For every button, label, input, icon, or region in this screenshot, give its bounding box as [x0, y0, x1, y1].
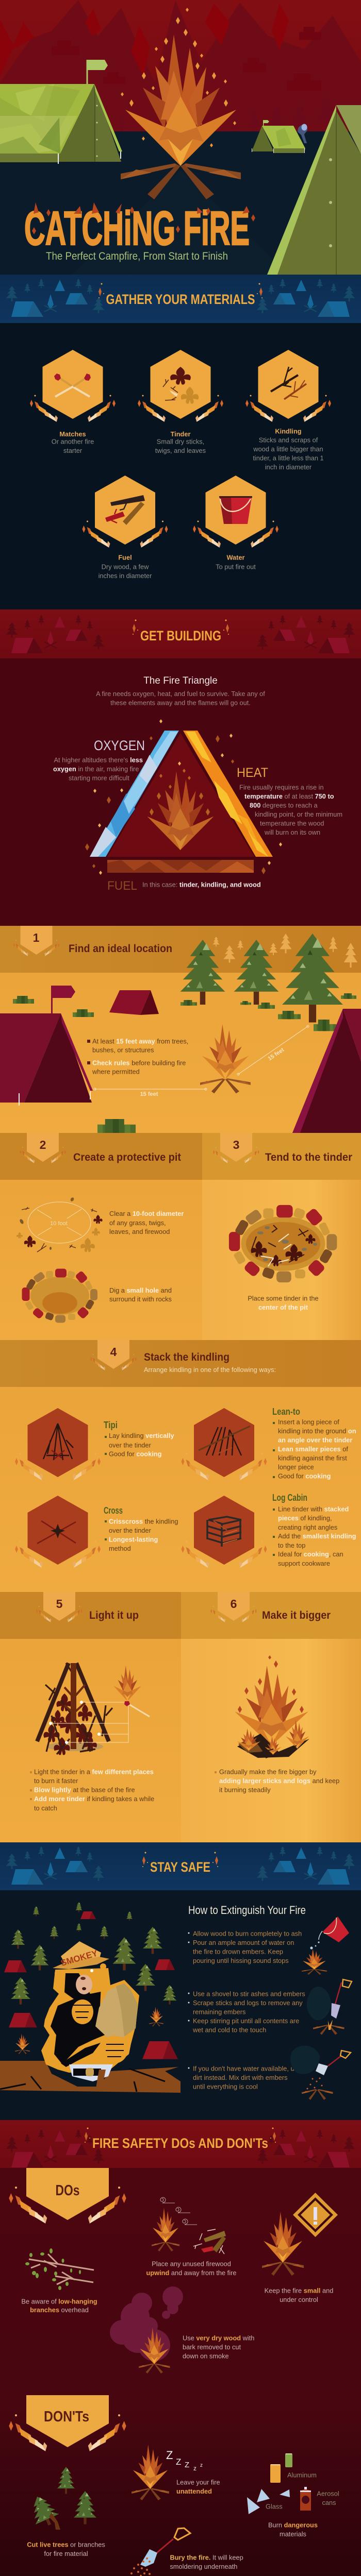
don't: bury the fire: smoldering underneath	[170, 2563, 237, 2570]
panel: fire safety dos and don'ts	[0, 2120, 361, 2576]
don't: dangerous materials: Aerosol	[317, 2489, 339, 2498]
item: matches: Or another fire	[52, 438, 94, 445]
method: lean-to: Good for cooking	[278, 1472, 331, 1480]
illustration: smokey bear	[0, 1941, 180, 2093]
do: small fire	[262, 2193, 338, 2303]
band pines	[212, 934, 357, 968]
heading: FIRE SAFETY DOs AND DON'Ts	[92, 2136, 268, 2151]
method: log cabin: Log Cabin	[272, 1493, 307, 1503]
ribbon: number 5: 5	[56, 1597, 63, 1611]
panel: get building, fire triangle	[0, 609, 361, 926]
heading: how to extinguish: How to Extinguish Your Fire	[188, 1904, 306, 1917]
section banner	[0, 275, 361, 323]
intro text: A fire needs oxygen, heat, and fuel to survive. Take any of	[96, 690, 265, 698]
subtitle: The Perfect Campfire, From Start to Finish	[46, 250, 228, 262]
cleared area diagram	[17, 1197, 103, 1252]
section banner	[0, 2120, 361, 2168]
heading: Tend to the tinder	[265, 1151, 352, 1163]
do: dry wood: Use very dry wood with	[183, 2334, 254, 2342]
method: lean-to: longer piece	[278, 1463, 314, 1471]
panel: stay safe	[0, 1842, 361, 2120]
method: tipi: Tipi	[104, 1420, 118, 1430]
icon: zzz: z	[200, 2463, 203, 2468]
campfire	[121, 35, 241, 199]
icon: lit match	[113, 1666, 150, 1717]
icon: wind swirls	[160, 2197, 197, 2225]
item: kindling: inch in diameter	[265, 463, 312, 471]
dos ribbon: DOs	[56, 2182, 79, 2199]
clear text: leaves, and firewood	[109, 1228, 170, 1235]
icon: aluminum cans	[270, 2453, 292, 2483]
item: water	[193, 476, 278, 571]
embers	[121, 8, 236, 147]
steps: dirt: until everything is cool	[193, 2082, 258, 2091]
heading: Stack the kindling	[144, 1351, 229, 1363]
method: cross: Cross	[104, 1505, 123, 1516]
item: fuel: inches in diameter	[99, 572, 152, 580]
don't: leave unattended: unattended	[176, 2487, 212, 2495]
left green tent	[0, 60, 122, 164]
steps: dirt	[188, 2065, 301, 2091]
location tips: bushes, or structures	[92, 1046, 154, 1054]
heading: Light it up	[89, 1609, 139, 1621]
small green tent with figure	[252, 120, 307, 153]
item: kindling: Sticks and scraps of	[259, 436, 318, 444]
icon: shovel with dirt	[290, 2046, 351, 2100]
steps: dirt: If you don't have water available, use	[193, 2065, 301, 2072]
intro text: these elements away and the flames will go out.	[110, 699, 251, 707]
item: tinder: Tinder	[171, 430, 190, 438]
icon: glass shards	[247, 2489, 290, 2514]
do: small fire: Keep the fire small and	[265, 2286, 333, 2295]
do: dry wood	[110, 2286, 254, 2374]
ribbon: number 5	[36, 1592, 83, 1622]
oxygen side	[90, 731, 179, 857]
light text: to burn it faster	[34, 1777, 78, 1785]
tinder text: center of the pit	[258, 1303, 308, 1311]
icon: smoke	[110, 2286, 183, 2361]
heat text: will burn on its own	[264, 828, 320, 836]
right maroon tent	[292, 1009, 361, 1133]
title	[24, 201, 255, 255]
rock stacks	[52, 27, 321, 91]
do: upwind firewood	[146, 2197, 236, 2277]
heading: the fire triangle: The Fire Triangle	[143, 675, 218, 686]
item: tinder: twigs, and leaves	[155, 447, 206, 454]
icon: shovel burying fire	[129, 2528, 190, 2576]
do: upwind firewood: Place any unused firewood	[152, 2260, 231, 2268]
steps: water: Allow wood to burn completely to ash	[193, 1930, 302, 1937]
panel: step 4 stack the kindling	[0, 1340, 361, 1592]
method: lean-to: Lean-to	[272, 1406, 300, 1417]
bigger text	[215, 1768, 339, 1794]
don't: dangerous materials: Glass	[266, 2503, 283, 2510]
method: log cabin: to the top	[278, 1541, 305, 1549]
ribbon: number 3	[213, 1133, 259, 1163]
do: upwind firewood: upwind and away from the fire	[146, 2269, 236, 2277]
tinder text: Place some tinder in the	[248, 1294, 319, 1302]
ribbon: number 4	[90, 1340, 137, 1370]
don't: leave unattended	[132, 2445, 220, 2500]
ribbon: number 2: 2	[40, 1138, 46, 1151]
method: lean-to	[182, 1406, 356, 1480]
method: lean-to: kindling against the first	[278, 1454, 347, 1462]
icon: crossed matches	[54, 374, 91, 397]
15 feet measure, diagonal: 15 feet	[267, 1047, 285, 1062]
icon: branches	[25, 2248, 94, 2290]
don't: cut live trees	[25, 2467, 105, 2557]
method: tipi: Lay kindling vertically	[109, 1432, 175, 1439]
bigger text: Gradually make the fire bigger by	[219, 1768, 317, 1775]
subheading: Arrange kindling in one of the following ways:	[144, 1366, 276, 1374]
don't: bury the fire	[129, 2528, 243, 2576]
item: matches	[30, 350, 116, 454]
panel: step 3 tend to the tinder	[202, 1133, 361, 1340]
icon: leaves and twigs	[163, 367, 199, 404]
panel: hero scene	[0, 0, 361, 275]
don't: dangerous materials	[247, 2453, 339, 2538]
heading: Create a protective pit	[73, 1151, 181, 1163]
oxygen text: starting more difficult	[69, 774, 129, 782]
fuel text	[107, 879, 261, 893]
fuel text: In this case: tinder, kindling, and wood	[142, 881, 261, 888]
item: kindling: wood a little bigger than	[253, 445, 323, 453]
ribbon: number 2	[20, 1133, 66, 1163]
light text: Blow lightly at the base of the fire	[34, 1786, 135, 1794]
don'ts ribbon	[9, 2395, 126, 2451]
method: cross: method	[109, 1545, 131, 1552]
method: log cabin: pieces of kindling,	[278, 1514, 332, 1522]
bigger text: it burning steadily	[219, 1786, 271, 1794]
dig text: Dig a small hole and	[109, 1286, 172, 1294]
intro text	[96, 690, 265, 707]
dug pit with rocks	[22, 1268, 97, 1323]
heading: STAY SAFE	[150, 1859, 210, 1875]
item: kindling: tinder, a little less than 1	[253, 454, 324, 462]
oxygen text: At higher altitudes there's less	[54, 756, 143, 764]
item: tinder: Small dry sticks,	[157, 438, 204, 445]
heat text: HEAT	[237, 766, 268, 780]
method: cross: over the tinder	[109, 1527, 152, 1534]
don't: dangerous materials: Burn dangerous	[268, 2521, 318, 2529]
dig text: surround it with rocks	[109, 1295, 172, 1303]
item: fuel: Fuel	[118, 553, 132, 562]
clear text: Clear a 10-foot diameter	[109, 1210, 184, 1217]
steps: shovel: Keep stirring pit until all contents are	[193, 2017, 299, 2025]
section banner	[0, 609, 361, 658]
item: water: To put fire out	[216, 563, 256, 571]
heading: Find an ideal location	[69, 943, 172, 955]
15 feet measure, horizontal	[94, 1088, 207, 1097]
background mountains	[0, 0, 361, 131]
method: log cabin: Add the smallest kindling	[278, 1532, 356, 1540]
method: lean-to: Lean smaller pieces of	[278, 1445, 348, 1453]
fuel text: FUEL	[107, 879, 137, 893]
heading: GATHER YOUR MATERIALS	[106, 292, 255, 307]
icon: shovel stirring embers	[307, 1979, 352, 2035]
don'ts ribbon: DON'Ts	[44, 2409, 89, 2425]
method: cross	[15, 1496, 178, 1568]
item: kindling: Kindling	[275, 428, 302, 435]
clear text: of any grass, twigs,	[109, 1219, 166, 1227]
heat text	[237, 766, 342, 836]
do: branches: Be aware of low-hanging	[21, 2298, 97, 2305]
steps: shovel: wet and cold to the touch	[192, 2026, 266, 2034]
method: cross: Crisscross the kindling	[109, 1518, 178, 1525]
method: tipi: over the tinder	[109, 1442, 152, 1449]
right big green tent	[267, 105, 361, 275]
ribbon: number 1: 1	[33, 931, 40, 944]
panel: step 6 make it bigger	[181, 1592, 361, 1842]
method: cross: Longest-lasting	[109, 1535, 158, 1544]
panel: gather your materials	[0, 275, 361, 609]
icon: warning diamond	[293, 2193, 338, 2237]
item: kindling	[245, 350, 331, 471]
icon: zzz: Z	[176, 2457, 181, 2467]
clear text	[109, 1210, 184, 1235]
don't: cut live trees: Cut live trees or branches	[27, 2541, 105, 2548]
icon: bucket	[219, 496, 252, 524]
heat text: kindling point, or the minimum	[255, 810, 342, 818]
light text	[30, 1768, 154, 1812]
cleared area diagram: 10 foot	[50, 1221, 68, 1227]
heat text: temperature of at least 750 to	[244, 792, 334, 800]
icon: bucket over fire	[302, 1917, 349, 1975]
method: lean-to: kindling into the ground on	[278, 1427, 356, 1435]
method: lean-to: Insert a long piece of	[278, 1418, 339, 1426]
oxygen text	[53, 738, 145, 782]
heat text: 800 degrees to reach a	[250, 802, 318, 809]
don't: leave unattended: Leave your fire	[176, 2478, 220, 2486]
icon: tipi sticks	[43, 1423, 73, 1460]
heading: GET BUILDING	[140, 628, 221, 643]
steps: water: pouring until hissing sound stops	[193, 1957, 289, 1964]
steps: dirt: dirt instead. Mix dirt with embers	[193, 2074, 287, 2081]
method: log cabin: creating right angles	[278, 1523, 337, 1531]
small maroon tent	[109, 990, 159, 1015]
heat side	[183, 731, 273, 857]
location tips: At least 15 feet away from trees,	[92, 1038, 188, 1045]
icon: logs	[105, 495, 145, 525]
fuel side	[107, 860, 254, 873]
fire triangle diagram	[85, 719, 282, 875]
method: tipi	[15, 1408, 175, 1480]
oxygen text: oxygen in the air, making fire	[53, 765, 139, 773]
ribbon: number 6: 6	[231, 1597, 237, 1611]
ribbon: number 6	[210, 1592, 257, 1622]
panel: step 1 find an ideal location	[0, 926, 361, 1133]
method: log cabin: support cookware	[278, 1560, 330, 1567]
don't: dangerous materials: cans	[322, 2499, 336, 2506]
icon: aerosol can	[300, 2487, 311, 2511]
bigger text: adding larger sticks and logs and keep	[219, 1777, 339, 1785]
light text: to catch	[34, 1804, 57, 1812]
do: dry wood: bark removed to cut	[183, 2343, 241, 2351]
method: log cabin: Line tinder with stacked	[278, 1505, 349, 1513]
do: dry wood: down on smoke	[183, 2352, 229, 2360]
heat text: temperature the wood	[260, 819, 324, 827]
illustration: smokey bear: SMOKEY	[59, 1948, 99, 1968]
steps: shovel	[188, 1990, 305, 2034]
tinder text	[248, 1294, 319, 1311]
panel: step 5 light it up	[0, 1592, 181, 1842]
icon: zzz: Z	[185, 2461, 189, 2469]
steps: shovel: Use a shovel to stir ashes and embers	[193, 1990, 305, 1998]
item: tinder	[138, 350, 223, 454]
method: tipi: Good for cooking	[109, 1450, 161, 1458]
heading: Make it bigger	[262, 1609, 331, 1621]
distant pines	[117, 96, 336, 132]
pit filled with tinder	[229, 1205, 337, 1282]
dos ribbon	[9, 2168, 126, 2224]
method: lean-to: an angle over the tinder	[278, 1436, 352, 1444]
15 feet measure, diagonal	[237, 1025, 309, 1075]
panel: step 2 create a protective pit	[0, 1133, 202, 1340]
do: small fire: under control	[280, 2296, 318, 2303]
ribbon: number 3: 3	[233, 1138, 239, 1151]
icon: firewood pile	[193, 2229, 226, 2254]
15 feet measure, horizontal: 15 feet	[140, 1091, 158, 1097]
do: branches: branches overhead	[30, 2306, 89, 2314]
location tips: Check rules before building fire	[92, 1059, 186, 1066]
big fire	[235, 1655, 309, 1758]
left maroon tent	[0, 986, 93, 1106]
item: fuel	[83, 476, 168, 580]
icon: zzz: Z	[166, 2449, 173, 2462]
tipi with ignition points	[37, 1663, 128, 1755]
small campfire	[200, 1024, 251, 1093]
don't: bury the fire: Bury the fire. It will keep	[170, 2553, 243, 2562]
don't: cut live trees: for fire material	[44, 2550, 88, 2557]
heat text: Fire usually requires a rise in	[239, 783, 324, 791]
steps: water: the fire to drown embers. Keep	[193, 1947, 283, 1956]
method: log cabin: Ideal for cooking, can	[278, 1550, 343, 1558]
item: matches: Matches	[59, 430, 86, 438]
item: fuel: Dry wood, a few	[102, 563, 149, 571]
icon: zzz	[166, 2449, 203, 2472]
steps: shovel: remaining embers	[193, 2008, 245, 2015]
steps: water	[188, 1930, 302, 1964]
oxygen text: OXYGEN	[94, 738, 145, 753]
icon: lean-to sticks	[199, 1426, 250, 1455]
dig text	[109, 1286, 172, 1303]
section banner	[0, 1842, 361, 1890]
trees	[180, 934, 343, 1022]
item: water: Water	[226, 553, 245, 562]
location tips	[87, 1038, 188, 1076]
don't: dangerous materials: materials	[280, 2530, 306, 2538]
icon: zzz: z	[193, 2465, 196, 2472]
steps: water: Pour an ample amount of water on	[193, 1939, 294, 1946]
icon: log cabin stack	[207, 1517, 241, 1547]
bushes	[13, 993, 356, 1133]
light text: Add more tinder if kindling takes a while	[34, 1795, 154, 1803]
ribbon: number 1	[13, 926, 59, 956]
forest backdrop	[4, 1902, 178, 2059]
location tips: where permitted	[92, 1067, 140, 1076]
steps: shovel: Scrape sticks and logs to remove any	[193, 1999, 303, 2007]
ribbon: number 4: 4	[110, 1345, 117, 1359]
icon: branches	[271, 367, 306, 399]
icon: crossed sticks	[37, 1521, 76, 1544]
do: branches	[21, 2248, 97, 2314]
light text: Light the tinder in a few different places	[34, 1768, 154, 1775]
don't: dangerous materials: Aluminum	[287, 2471, 317, 2479]
method: log cabin	[182, 1493, 356, 1568]
item: matches: starter	[63, 447, 83, 454]
